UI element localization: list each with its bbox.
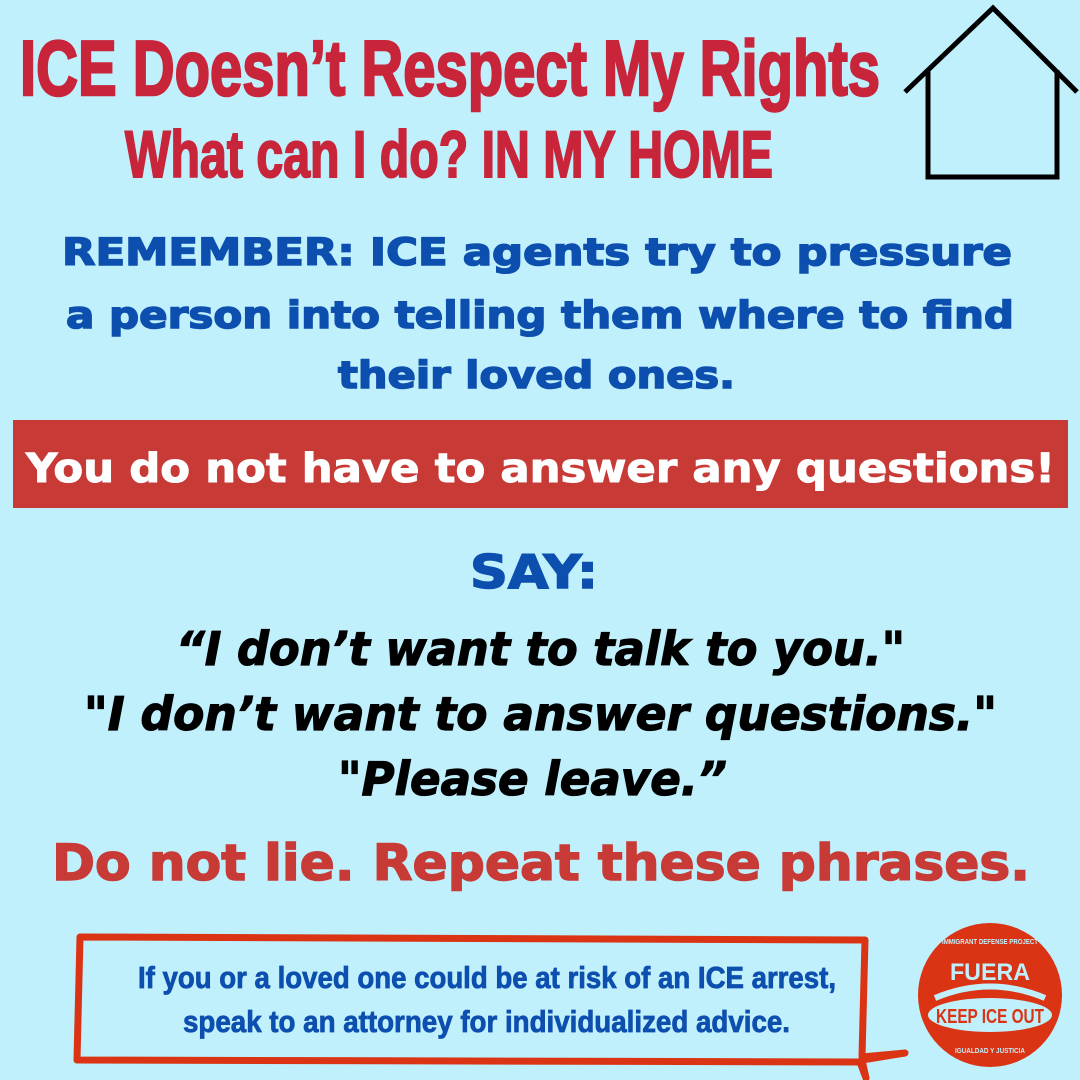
quotes (84, 622, 997, 806)
quotes: "Please leave.” (338, 752, 727, 806)
quotes: “I don’t want to talk to you." (176, 622, 905, 676)
text block: remember: their loved ones. (338, 354, 735, 397)
banner: no questions: You do not have to answer any questions! (25, 446, 1055, 492)
logo: KEEP ICE OUT (936, 1006, 1044, 1028)
warning text: Do not lie. Repeat these phrases. (52, 834, 1030, 892)
text block: remember: a person into telling them where to find (66, 294, 1014, 337)
logo (918, 923, 1062, 1067)
icon: house (905, 8, 1077, 177)
text block: remember: REMEMBER: ICE agents try to pressure (62, 231, 1012, 274)
logo: IGUALDAD Y JUSTICIA (955, 1048, 1025, 1055)
heading: say: SAY: (470, 545, 598, 599)
banner: no questions (13, 420, 1068, 508)
text block: remember (62, 231, 1014, 397)
logo: IMMIGRANT DEFENSE PROJECT (942, 939, 1039, 946)
logo: FUERA (950, 959, 1030, 986)
quotes: "I don’t want to answer questions." (84, 687, 997, 741)
callout: attorney advice: If you or a loved one could be at risk of an ICE arrest, (138, 960, 836, 995)
callout: attorney advice: speak to an attorney for individualized advice. (183, 1004, 790, 1039)
callout: attorney advice (77, 937, 905, 1078)
subtitle: What can I do? IN MY HOME (125, 117, 773, 191)
